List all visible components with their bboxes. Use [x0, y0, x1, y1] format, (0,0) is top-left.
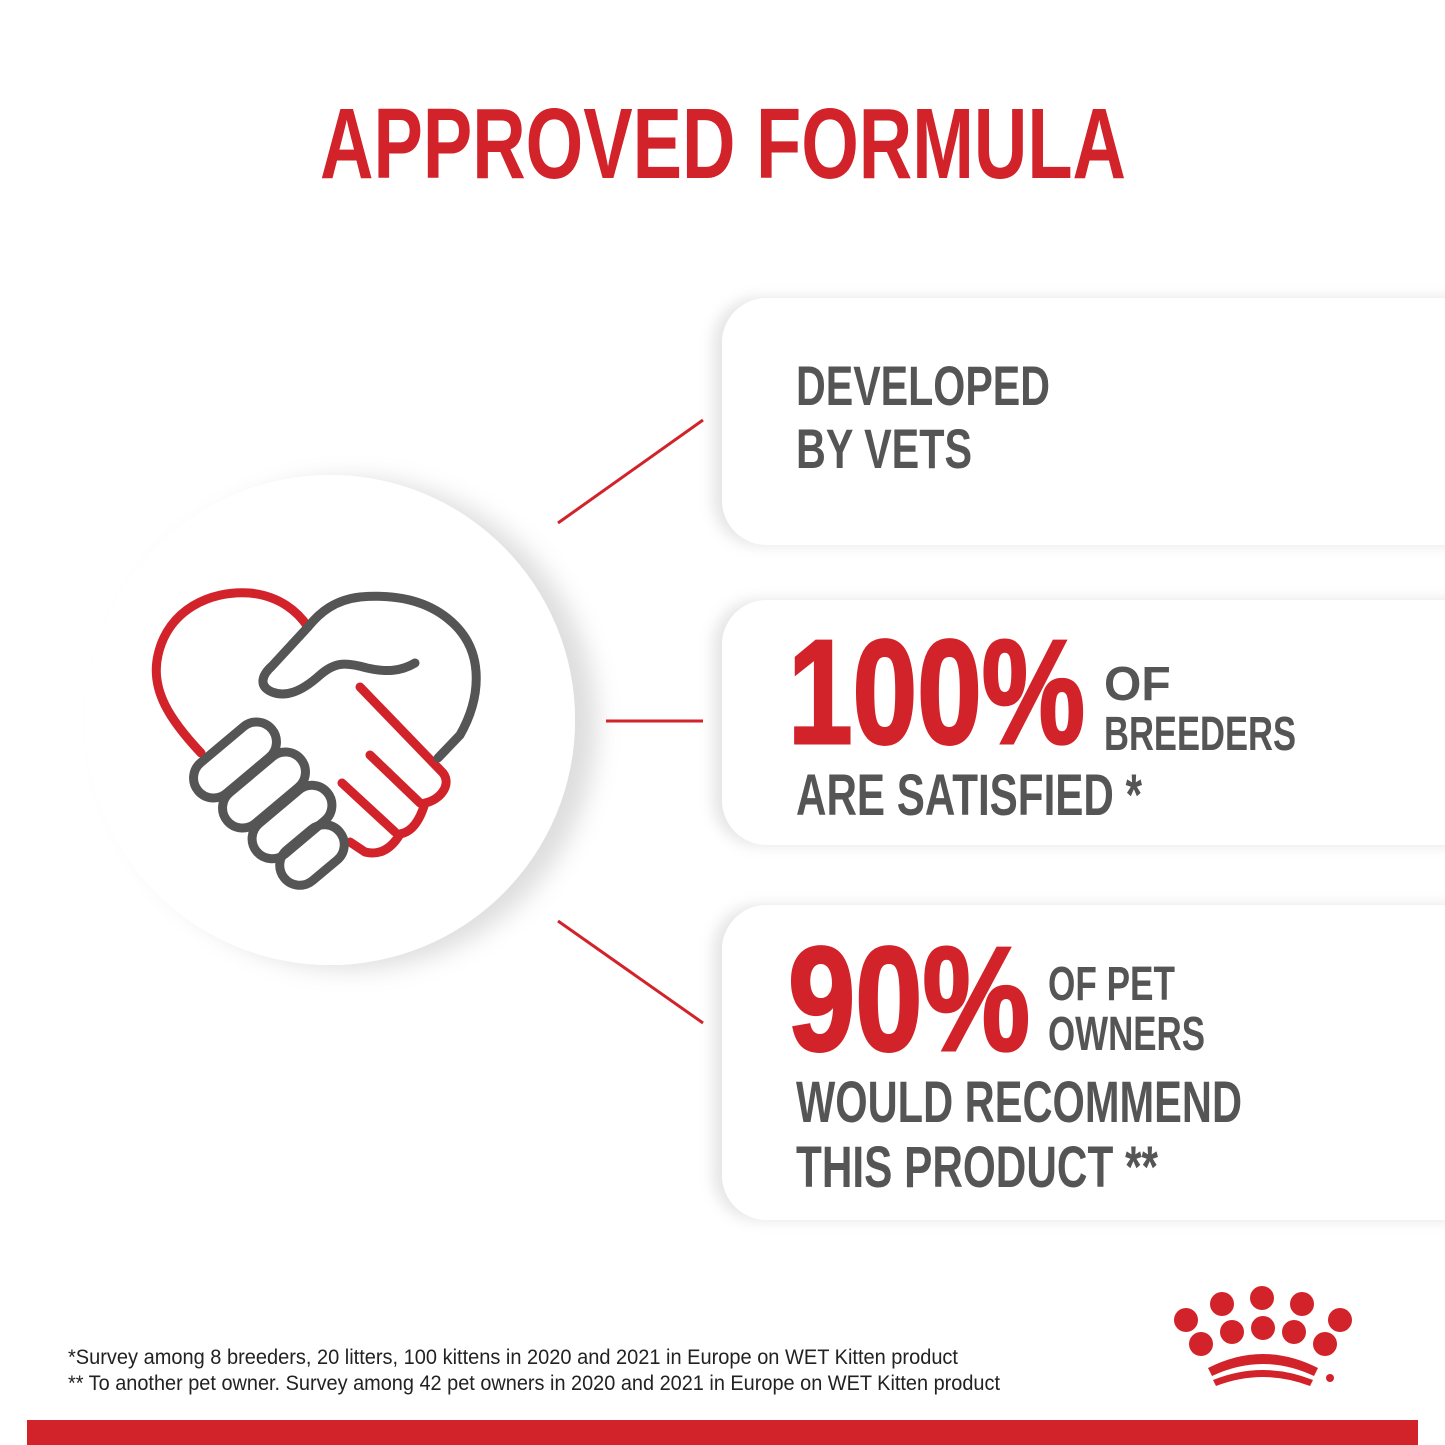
footnotes: ** To another pet owner. Survey among 42 pet owners in 2020 and 2021 in Europe on WET Kitten product	[68, 1372, 1000, 1395]
panel: 100% breeders: 100%	[788, 610, 1085, 775]
arrow: connector lines	[558, 420, 703, 1023]
panel: 90% pet owners: 90%	[788, 917, 1030, 1082]
panel: 100% breeders: ARE SATISFIED *	[796, 763, 1142, 828]
panel: developed by vets	[722, 298, 1445, 545]
panel: 90% pet owners: THIS PRODUCT **	[796, 1135, 1158, 1200]
panel: 90% pet owners	[722, 905, 1445, 1220]
bottom red bar	[27, 1420, 1418, 1445]
title: APPROVED FORMULA	[320, 88, 1126, 200]
panel: 90% pet owners: OF PET	[1048, 958, 1175, 1011]
panel: 100% breeders	[722, 600, 1445, 845]
panel: developed by vets: BY VETS	[796, 417, 972, 480]
panel: 100% breeders: OF	[1104, 658, 1171, 711]
panel: 100% breeders: BREEDERS	[1104, 708, 1296, 761]
panel: 90% pet owners: WOULD RECOMMEND	[796, 1070, 1242, 1135]
panel: developed by vets: DEVELOPED	[796, 354, 1050, 417]
logo: crown	[1174, 1286, 1352, 1386]
panel: 90% pet owners: OWNERS	[1048, 1008, 1205, 1061]
icon: handshake heart	[156, 593, 476, 893]
circle: handshake background	[85, 475, 575, 965]
footnotes: *Survey among 8 breeders, 20 litters, 100 kittens in 2020 and 2021 in Europe on WET Kitten product	[68, 1346, 958, 1369]
footnotes	[68, 1346, 1000, 1395]
